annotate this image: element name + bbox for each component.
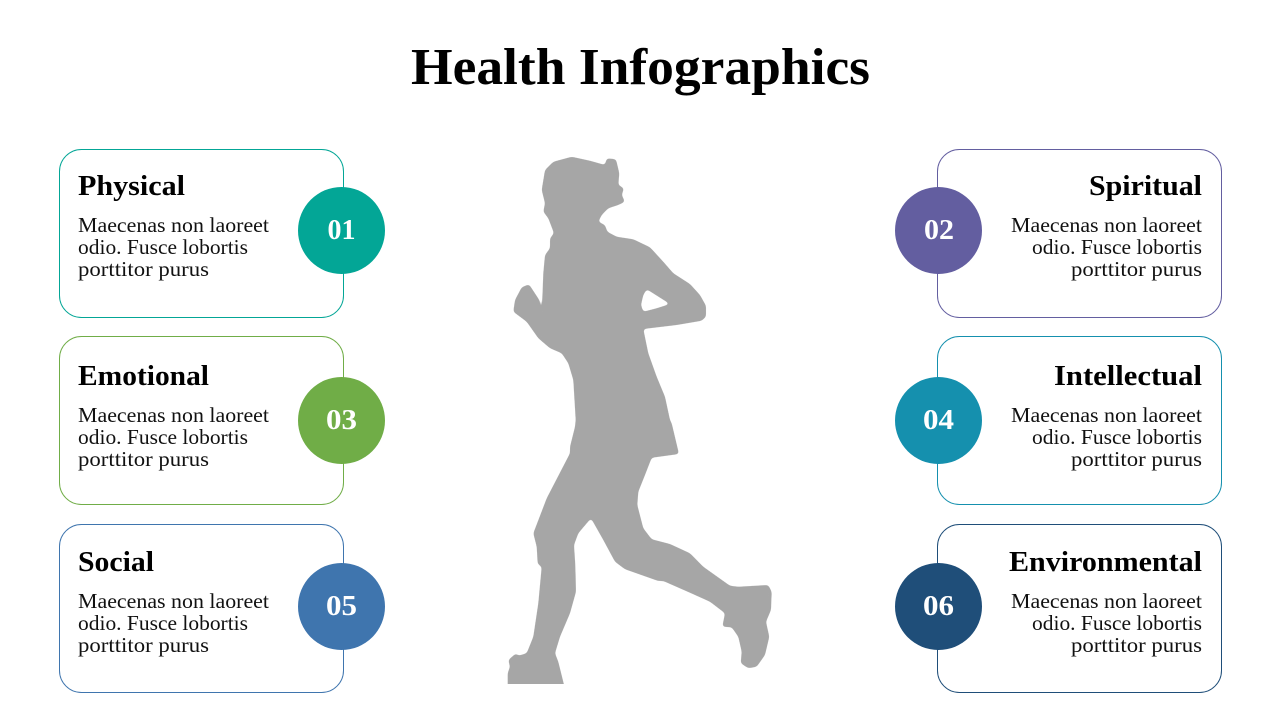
text block: physical: odio. Fusce lobortis: [78, 235, 248, 259]
heading: spiritual: Spiritual: [1089, 170, 1202, 202]
number badge 05: [298, 563, 385, 650]
text block: intellectual: [1011, 403, 1202, 471]
panel: spiritual: [895, 150, 1222, 318]
panel: social: [60, 524, 385, 692]
text block: physical: porttitor purus: [78, 257, 209, 281]
number badge 06: [895, 563, 982, 650]
number badge 06: 06: [923, 590, 954, 622]
heading: intellectual: Intellectual: [1054, 360, 1202, 392]
text block: emotional: porttitor purus: [78, 447, 209, 471]
text block: social: porttitor purus: [78, 633, 209, 657]
panel: environmental: [895, 524, 1222, 692]
text block: physical: Maecenas non laoreet: [78, 213, 269, 237]
text block: social: [78, 589, 269, 657]
number badge 02: [895, 187, 982, 274]
panel: physical: [60, 150, 385, 318]
number badge 03: 03: [326, 404, 357, 436]
text block: physical: [78, 213, 269, 281]
text block: emotional: Maecenas non laoreet: [78, 403, 269, 427]
number badge 03: [298, 377, 385, 464]
heading: physical: Physical: [78, 170, 185, 202]
text block: spiritual: porttitor purus: [1071, 257, 1202, 281]
text block: environmental: [1011, 589, 1202, 657]
text block: environmental: odio. Fusce lobortis: [1032, 611, 1202, 635]
heading: environmental: Environmental: [1009, 546, 1202, 578]
text block: emotional: [78, 403, 269, 471]
number badge 04: [895, 377, 982, 464]
text block: environmental: porttitor purus: [1071, 633, 1202, 657]
text block: emotional: odio. Fusce lobortis: [78, 425, 248, 449]
text block: social: Maecenas non laoreet: [78, 589, 269, 613]
text block: social: odio. Fusce lobortis: [78, 611, 248, 635]
number badge 05: 05: [326, 590, 357, 622]
text block: environmental: Maecenas non laoreet: [1011, 589, 1202, 613]
heading: emotional: Emotional: [78, 360, 209, 392]
heading: social: Social: [78, 546, 154, 578]
number badge 01: 01: [328, 214, 356, 246]
panel: emotional: [60, 336, 385, 504]
text block: intellectual: Maecenas non laoreet: [1011, 403, 1202, 427]
text block: spiritual: odio. Fusce lobortis: [1032, 235, 1202, 259]
text block: intellectual: porttitor purus: [1071, 447, 1202, 471]
panel: intellectual: [895, 336, 1222, 504]
text block: intellectual: odio. Fusce lobortis: [1032, 425, 1202, 449]
number badge 01: [298, 187, 385, 274]
running person silhouette: [508, 157, 772, 690]
text block: spiritual: Maecenas non laoreet: [1011, 213, 1202, 237]
title: Health Infographics: [411, 39, 870, 96]
number badge 02: 02: [924, 214, 954, 246]
text block: spiritual: [1011, 213, 1202, 281]
number badge 04: 04: [923, 404, 954, 436]
